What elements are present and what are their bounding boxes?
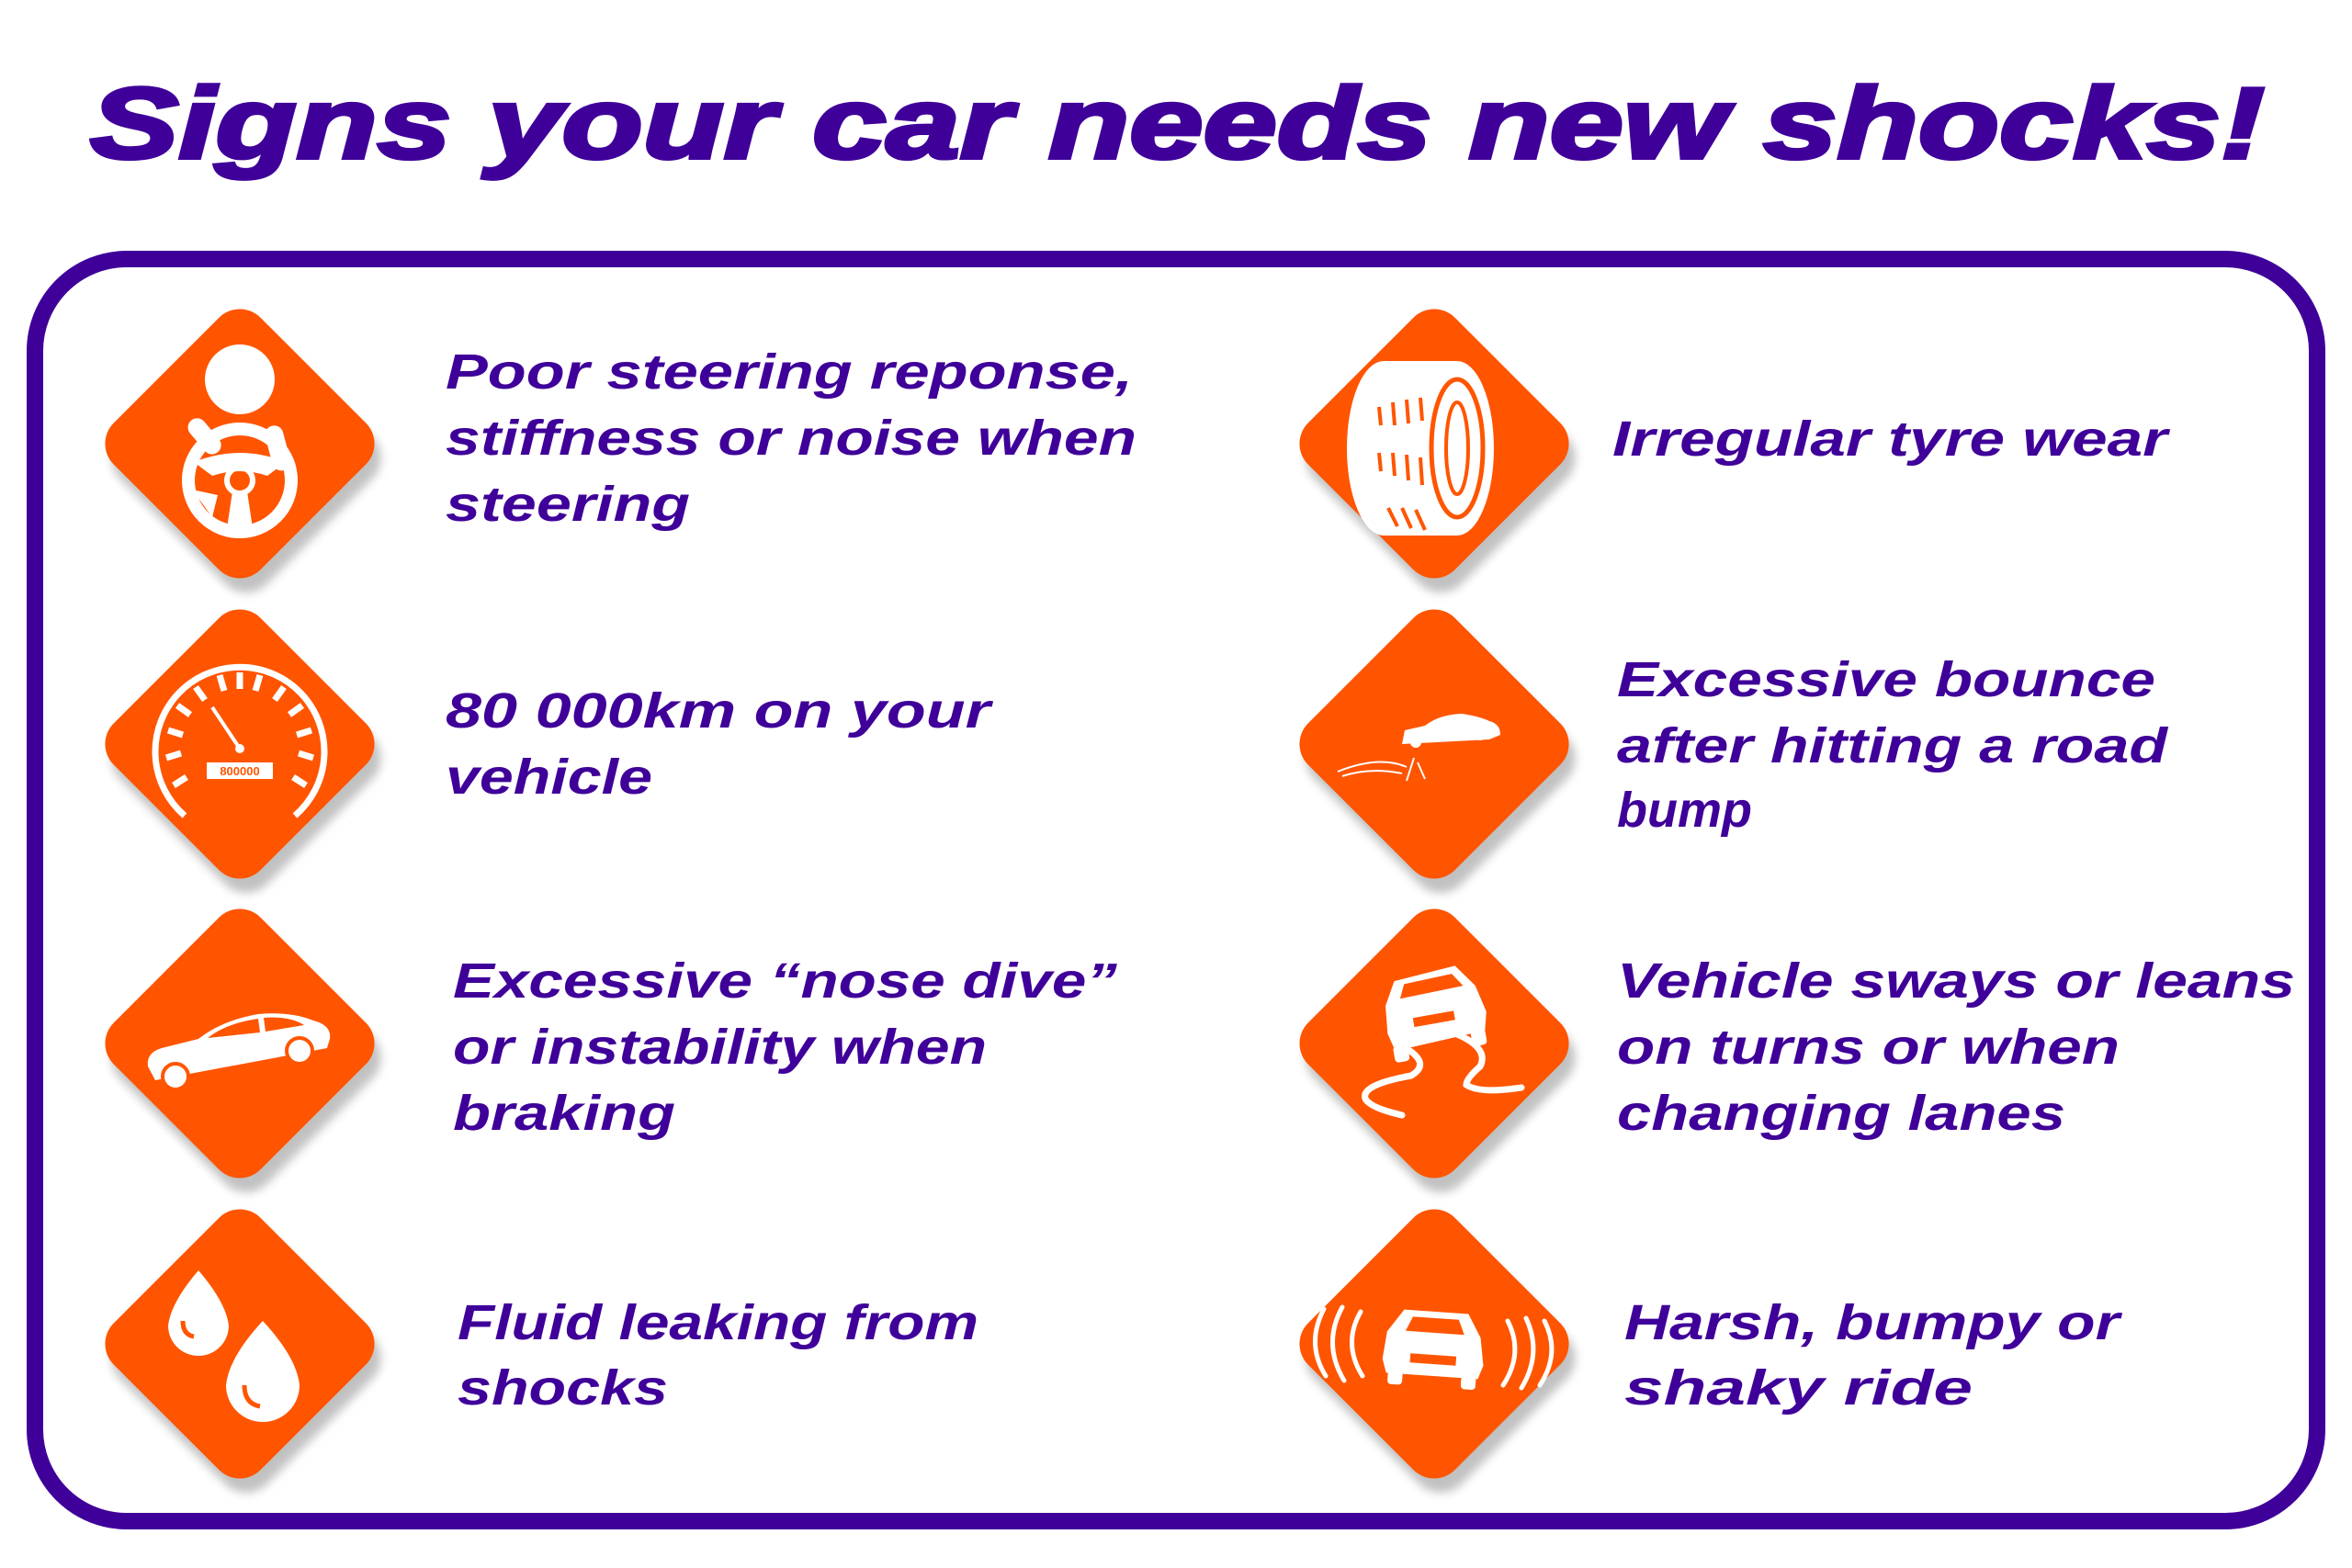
text: nose dive: braking [453, 1086, 675, 1141]
text: sway [1617, 953, 2295, 1141]
text: sway: Vehicle sways or leans [1617, 953, 2295, 1009]
text: steering: Poor steering reponse, [446, 344, 1133, 400]
icon: speedometer [93, 597, 393, 905]
icon: steering [93, 297, 393, 604]
text: shaky [1624, 1295, 2123, 1416]
text: steering: stiffness or noise when [446, 411, 1136, 466]
text: steering: steering [446, 477, 690, 532]
icon: speedometer: 800000 [220, 764, 260, 778]
icon: shaky ride [1287, 1197, 1588, 1505]
text: fluid [458, 1295, 978, 1416]
text: steering [446, 344, 1136, 532]
text: tyre: Irregular tyre wear [1612, 412, 2171, 467]
text: bounce: after hitting a road [1617, 718, 2168, 773]
icon: bounce [1287, 597, 1588, 905]
text: shaky: shaky ride [1624, 1360, 1973, 1416]
text: nose dive [453, 953, 1117, 1141]
text: bounce: bump [1617, 783, 1752, 838]
text: sway: changing lanes [1617, 1086, 2065, 1141]
text: bounce [1617, 652, 2168, 838]
text: shaky: Harsh, bumpy or [1624, 1295, 2123, 1350]
icon: sway [1287, 897, 1588, 1204]
text: bounce: Excessive bounce [1617, 652, 2155, 707]
text: sway: on turns or when [1617, 1020, 2120, 1075]
icon: car nose dive [93, 897, 393, 1204]
title: Signs your car needs new shocks! [90, 67, 2265, 180]
frame panel [35, 259, 2317, 1521]
text: nose dive: or instability when [453, 1020, 987, 1075]
text: mileage: 80 000km on your [446, 683, 994, 739]
text: fluid: Fluid leaking from [458, 1295, 978, 1350]
icon: tyre [1287, 297, 1588, 604]
text: nose dive: Excessive “nose dive” [453, 953, 1117, 1009]
text: mileage [446, 683, 994, 805]
text: mileage: vehicle [446, 750, 652, 805]
text: fluid: shocks [458, 1360, 668, 1416]
icon: fluid drops [93, 1197, 393, 1505]
